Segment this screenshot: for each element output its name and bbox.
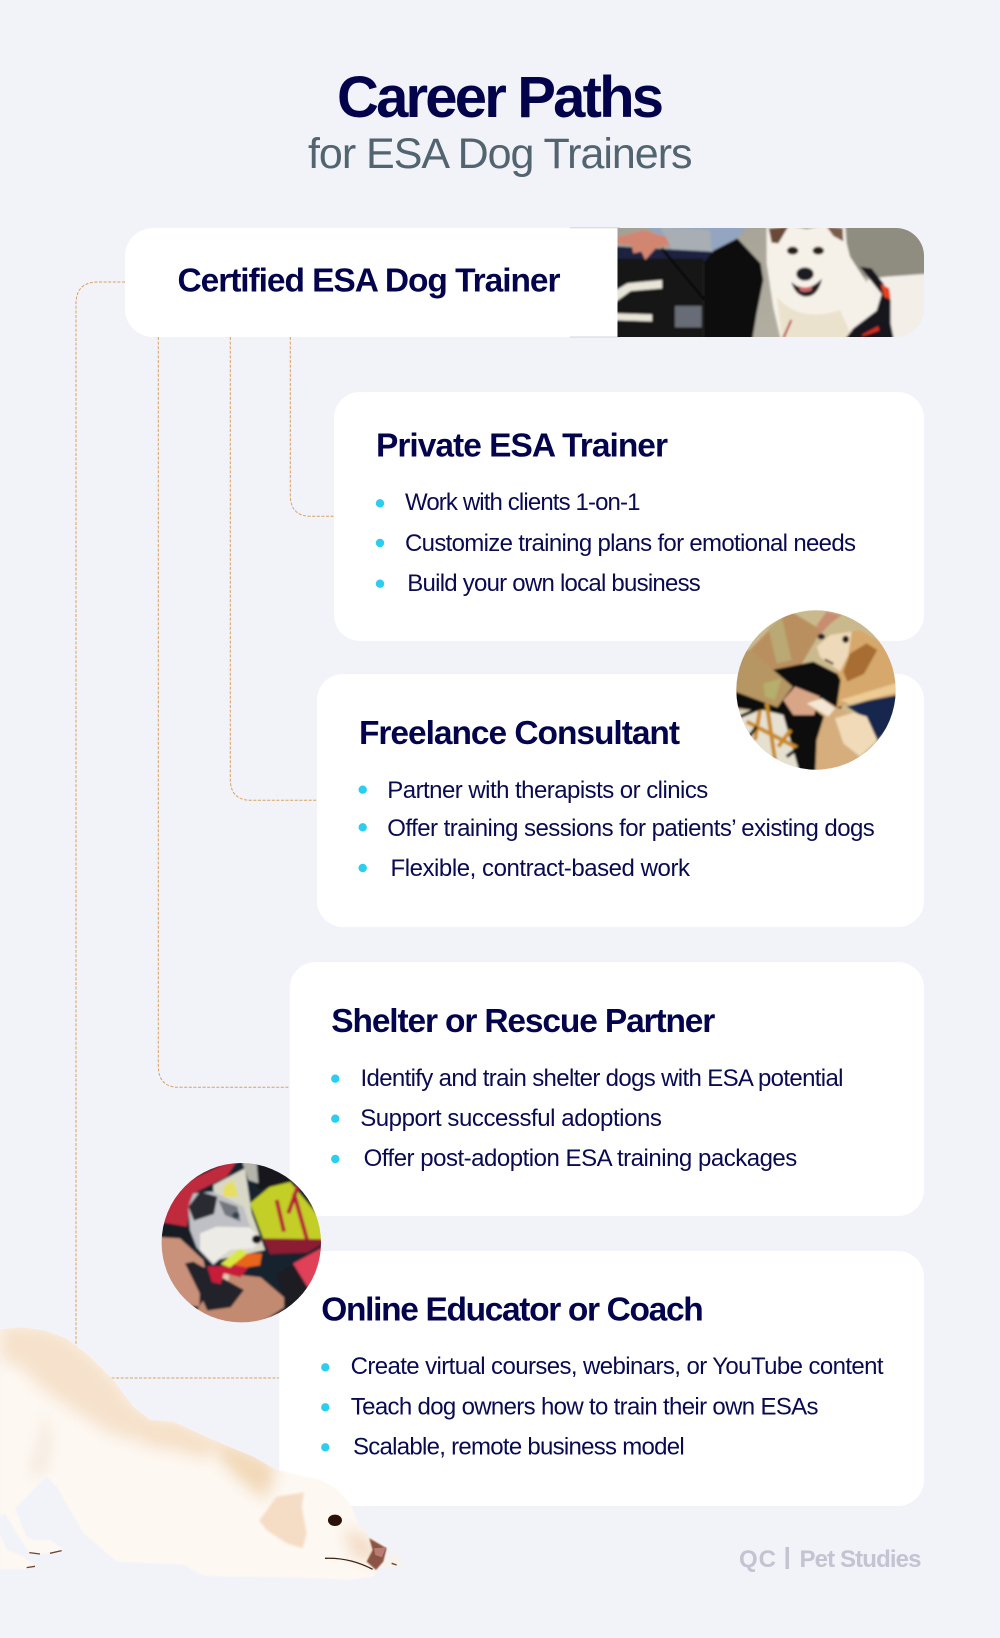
bullet list: Teach dog owners how to train their own ESAs xyxy=(351,1394,818,1421)
title: Career Paths xyxy=(337,65,664,130)
panel: shelter or rescue partner xyxy=(290,962,924,1216)
photo: rescue dog held by responder xyxy=(162,1163,321,1322)
subtitle: for ESA Dog Trainers xyxy=(308,130,692,178)
footer logo: QC Pet Studies: QC xyxy=(739,1546,776,1573)
bullet list: Flexible, contract-based work xyxy=(390,855,691,882)
photo: golden retriever giving paw xyxy=(736,610,896,770)
bullet list xyxy=(376,489,856,597)
bullet list: Create virtual courses, webinars, or YouTube content xyxy=(351,1353,884,1380)
heading: Private ESA Trainer xyxy=(376,428,668,465)
mouth xyxy=(325,1558,373,1569)
title xyxy=(308,65,692,178)
ear xyxy=(259,1493,307,1548)
illustration: cream labrador in a play bow xyxy=(0,1323,405,1580)
fur shading xyxy=(0,1323,380,1563)
toes xyxy=(27,1551,397,1568)
heading: Certified ESA Dog Trainer xyxy=(178,263,560,300)
bullet list xyxy=(321,1353,884,1461)
panel: certified ESA dog trainer xyxy=(125,227,924,338)
footer logo: QC Pet Studies: Pet Studies xyxy=(800,1546,922,1573)
bullet list xyxy=(358,777,875,882)
bullet list: Build your own local business xyxy=(407,570,701,597)
eye xyxy=(328,1515,342,1526)
bullet list: Scalable, remote business model xyxy=(353,1434,685,1461)
bullet list: Offer training sessions for patients’ existing dogs xyxy=(387,815,875,842)
panel: private ESA trainer xyxy=(334,392,924,641)
heading: Freelance Consultant xyxy=(359,715,680,752)
bullet list: Work with clients 1-on-1 xyxy=(405,489,640,516)
bullet list: Partner with therapists or clinics xyxy=(387,777,708,804)
bullet list: Offer post-adoption ESA training packages xyxy=(364,1145,797,1172)
connector lines from certified trainer to each career path xyxy=(76,282,334,1378)
nose xyxy=(367,1538,387,1570)
heading: Shelter or Rescue Partner xyxy=(331,1003,715,1040)
heading: Online Educator or Coach xyxy=(321,1292,704,1329)
bullet list: Identify and train shelter dogs with ESA potential xyxy=(360,1065,844,1092)
bullet list: Support successful adoptions xyxy=(360,1105,662,1132)
panel: freelance consultant xyxy=(317,674,924,927)
bullet list xyxy=(331,1065,844,1172)
bullet list: Customize training plans for emotional needs xyxy=(405,530,856,557)
panel: online educator or coach xyxy=(279,1251,924,1506)
photo: service dog beside wheelchair xyxy=(618,228,924,337)
footer logo: QC Pet Studies xyxy=(739,1546,922,1573)
